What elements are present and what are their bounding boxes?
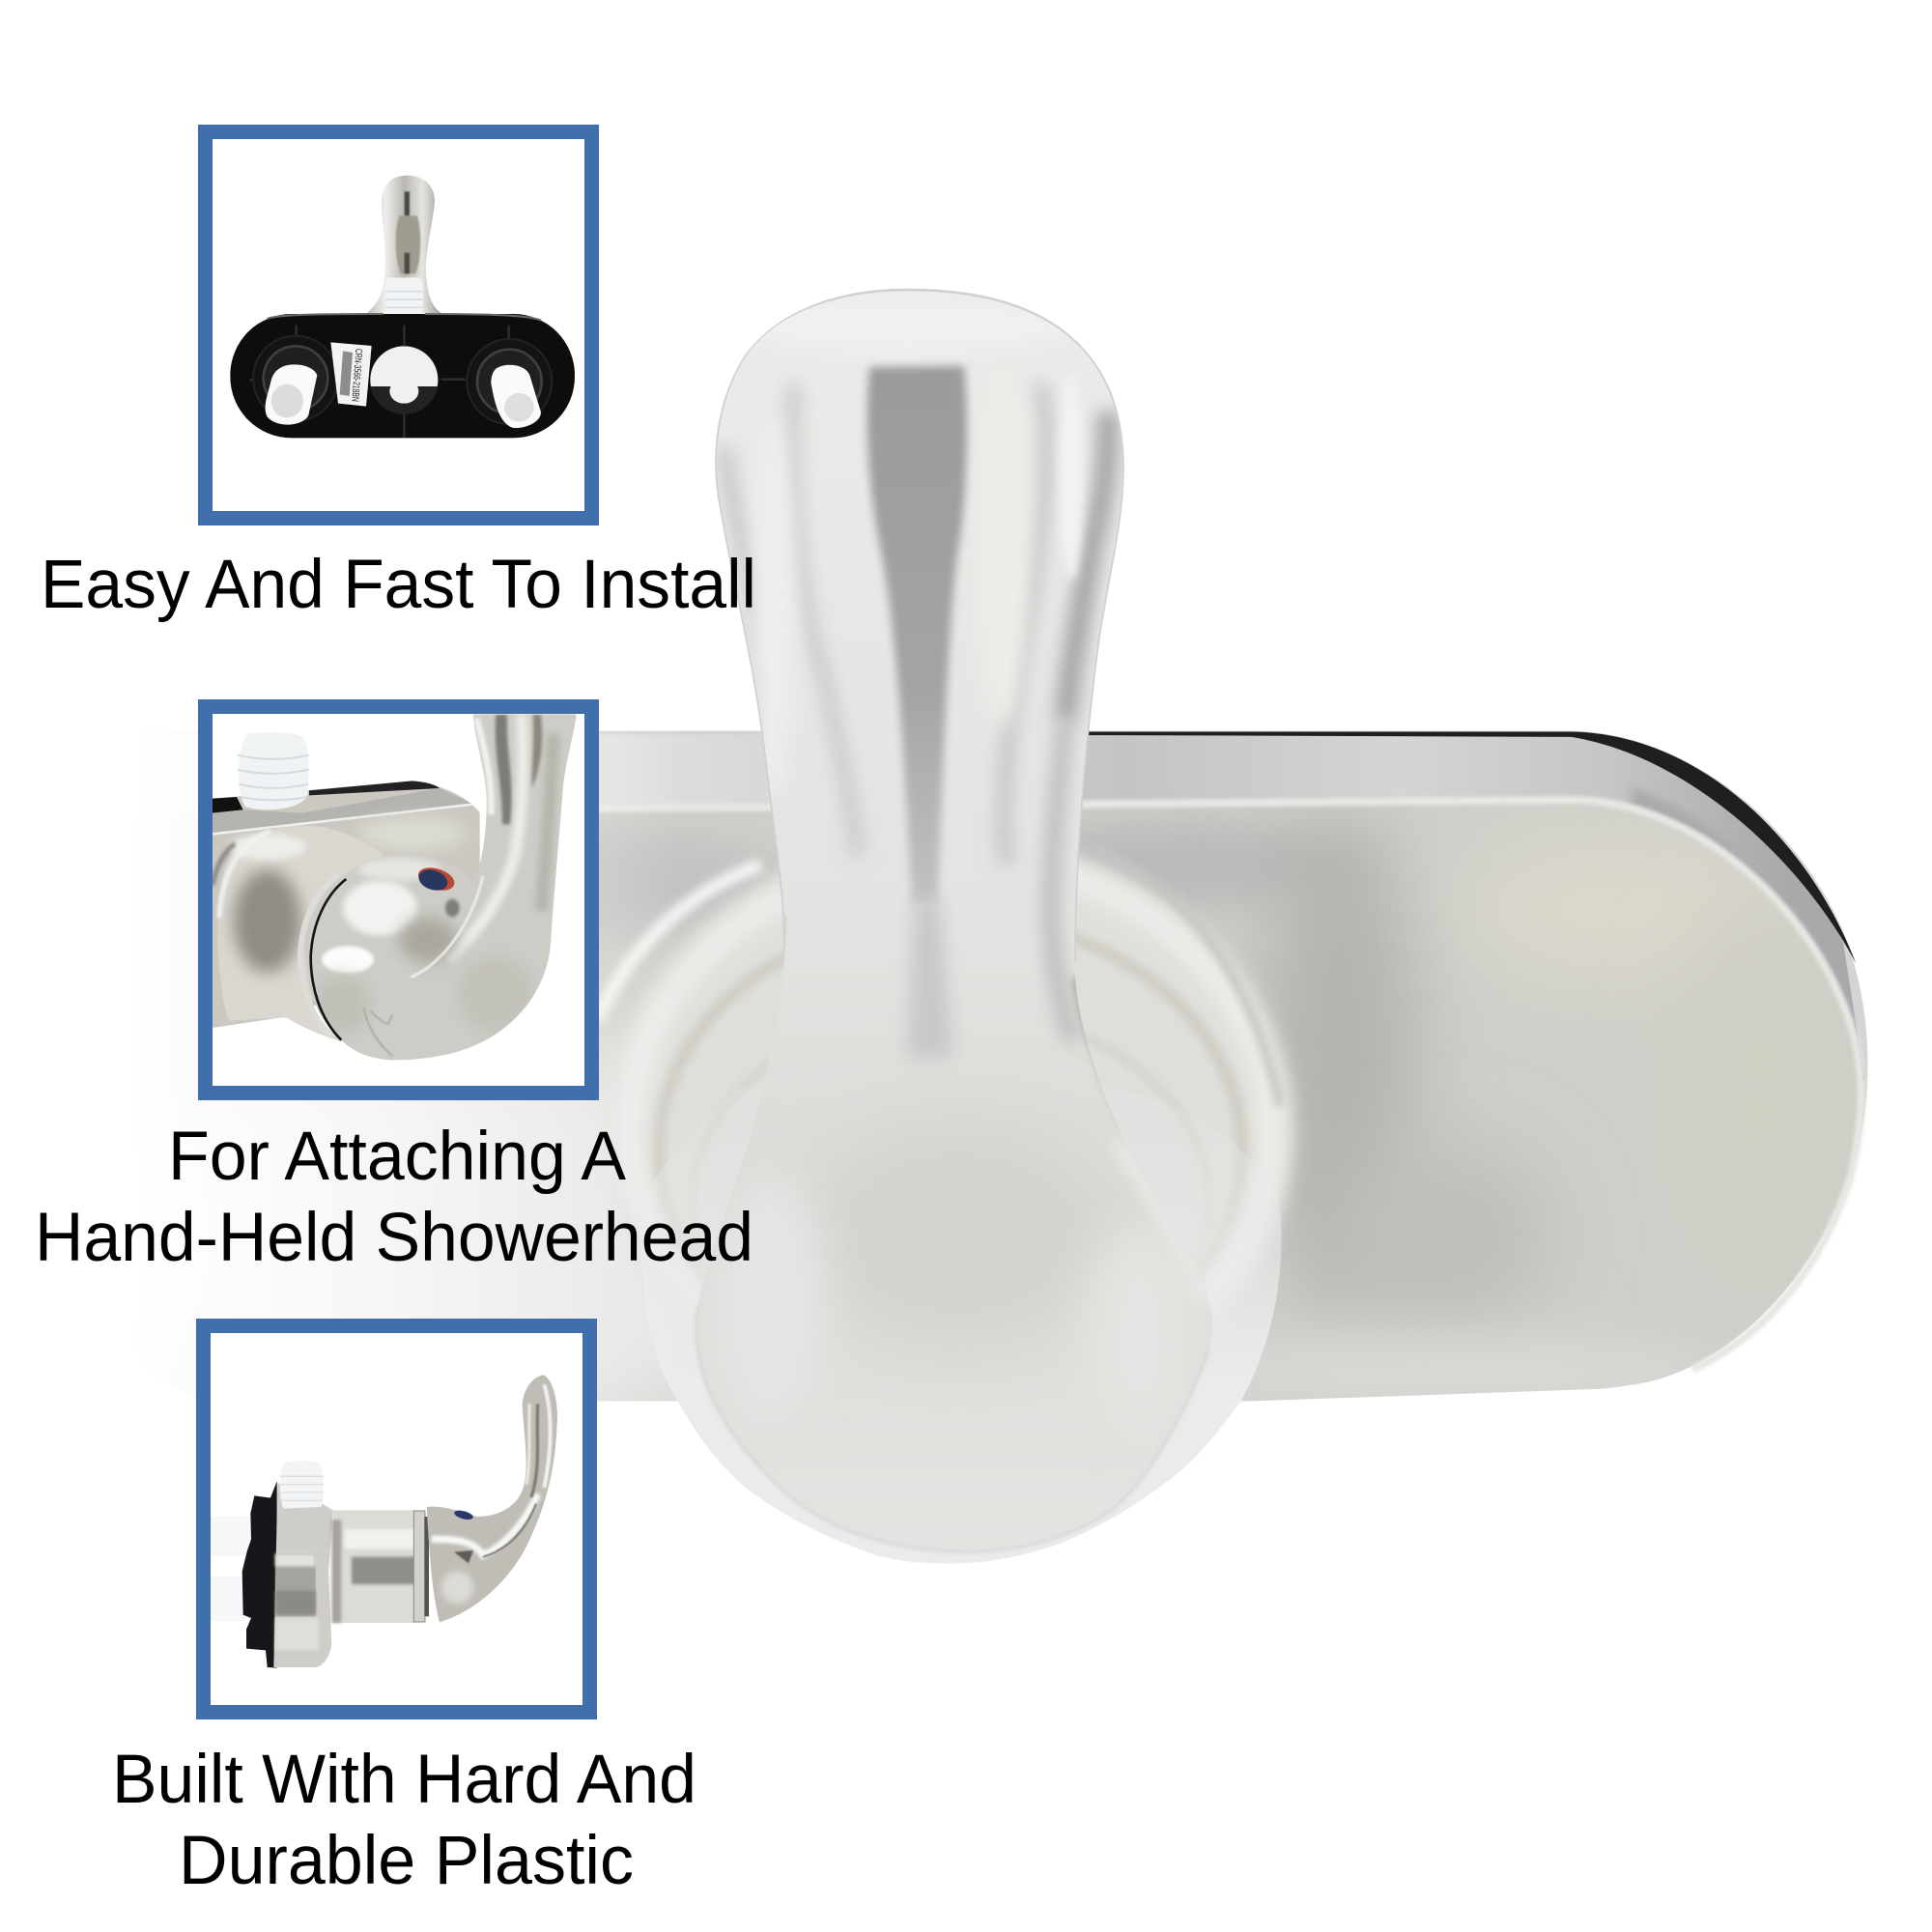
panel: side view of faucet: [203, 1325, 589, 1712]
cylinder body: [213, 826, 386, 1041]
caption: hand-held showerhead: For Attaching A: [168, 1119, 627, 1195]
caption: easy install: Easy And Fast To Install: [41, 547, 756, 623]
polished lever: [300, 714, 577, 1060]
faucet handle seen from back: [367, 176, 441, 313]
panel: close-up of lever: [205, 707, 591, 1094]
main faucet photograph: [62, 278, 1932, 1572]
side reflections: [792, 384, 858, 856]
handle lever: [695, 288, 1212, 1553]
label sticker: [330, 342, 372, 407]
label sticker: CRN-3566-218BN: [350, 348, 363, 402]
panel: back view of faucet: [205, 131, 591, 518]
mounting ring: [597, 835, 1293, 1430]
top thread nipple: [384, 277, 423, 319]
left white pipe: [266, 364, 317, 425]
plate front face: [412, 806, 1859, 1401]
caption: hard durable plastic: [112, 1742, 696, 1899]
white pipes: [211, 1516, 253, 1621]
polished lever: [427, 1375, 557, 1622]
handle rim glow: [772, 317, 1050, 329]
faucet plate: [213, 781, 480, 1028]
dark centre reflection: [867, 366, 967, 903]
faucet plate rear edge: [97, 731, 1867, 1401]
handle outer cap: [640, 1089, 1282, 1563]
plate top band: [97, 733, 1864, 1080]
centre opening: [367, 346, 441, 414]
black rear plate: [230, 314, 575, 438]
caption: hand-held showerhead: Hand-Held Showerhead: [35, 1200, 753, 1276]
left white fade over plate: [62, 692, 709, 1468]
caption: hard durable plastic: Durable Plastic: [179, 1823, 634, 1899]
caption: hard durable plastic: Built With Hard And: [112, 1742, 696, 1818]
white top nipple: [279, 1461, 324, 1509]
left valve seat: [253, 336, 338, 421]
caption: hand-held showerhead: [35, 1119, 753, 1276]
mounting flange: [273, 1483, 333, 1667]
cylinder body: [331, 1510, 429, 1623]
right valve seat: [467, 339, 552, 424]
black retaining nuts: [242, 1481, 277, 1668]
right white pipe: [491, 365, 541, 428]
white top nipple: [238, 732, 309, 810]
plate bright rim: [97, 800, 1861, 1369]
hot and cold indicator: [418, 867, 454, 891]
